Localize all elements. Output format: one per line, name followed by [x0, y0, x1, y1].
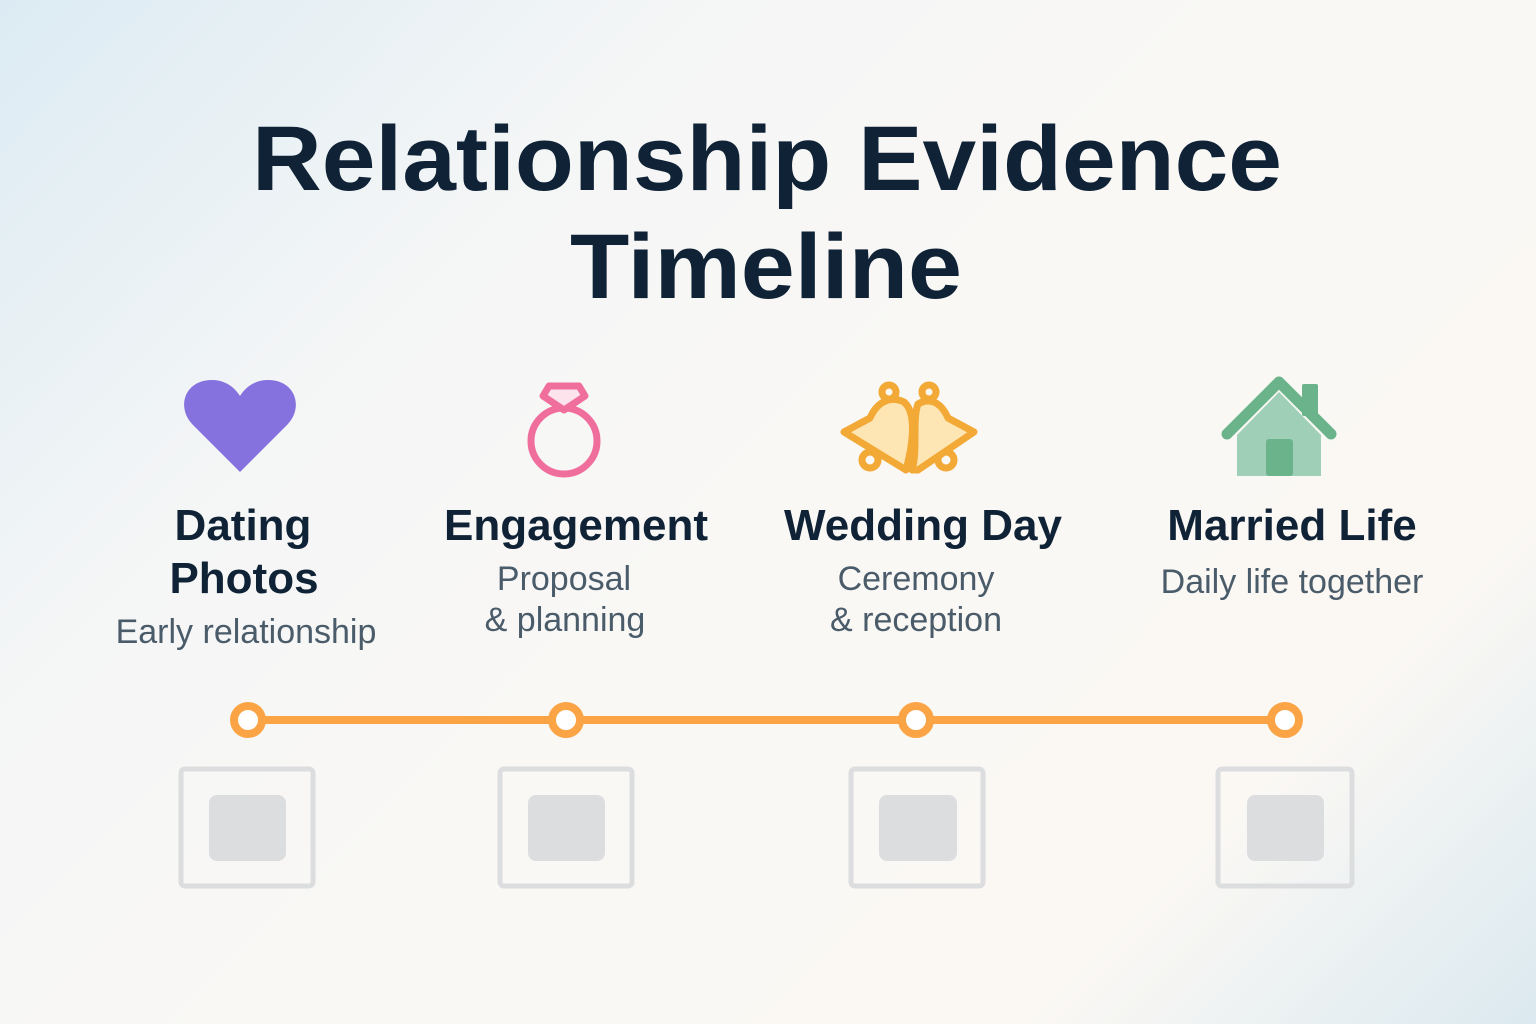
label: married: Married Life: [1167, 501, 1417, 550]
label: engagement: [444, 501, 708, 639]
labels: [116, 501, 1423, 651]
label: wedding: & reception: [830, 601, 1002, 639]
label: married: [1161, 501, 1423, 601]
label: married: Daily life together: [1161, 563, 1423, 601]
label: wedding: [784, 501, 1062, 639]
title: Timeline: [570, 216, 962, 318]
icon: heart: [184, 380, 296, 472]
icon: house: [1227, 382, 1331, 476]
label: dating: [116, 501, 376, 651]
label: dating: Dating: [175, 501, 311, 550]
photo placeholders: [181, 769, 1352, 886]
icon: ring: [531, 386, 597, 474]
label: engagement: Proposal: [497, 560, 631, 598]
label: dating: Early relationship: [116, 613, 376, 651]
title: [252, 108, 1282, 318]
title: Relationship Evidence: [252, 108, 1282, 210]
label: engagement: & planning: [485, 601, 645, 639]
timeline: [234, 706, 1299, 734]
label: dating: Photos: [169, 554, 319, 603]
label: engagement: Engagement: [444, 501, 708, 550]
icon: bells: [844, 385, 974, 470]
label: wedding: Wedding Day: [784, 501, 1062, 550]
label: wedding: Ceremony: [838, 560, 994, 598]
